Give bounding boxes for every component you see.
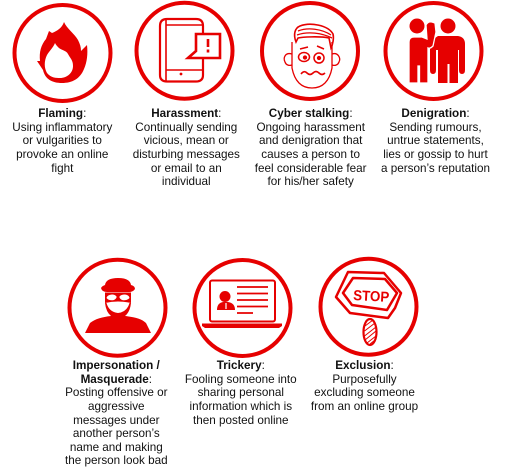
text: cyber stalking [254,107,367,188]
text: impersonation: Posting offensive or [65,386,168,399]
text: exclusion [311,359,418,413]
text: impersonation: aggressive [88,400,145,413]
text: cyber stalking: Cyber stalking: [269,107,353,120]
text: harassment: disturbing messages [133,148,240,161]
text: cyber stalking: causes a person to [261,148,360,161]
text: flaming: fight [51,162,73,174]
text: impersonation [65,359,168,467]
text: trickery [185,359,297,426]
text: denigration [381,107,490,174]
icon: tablet with alert message [136,3,232,99]
text: flaming: Using inflammatory [12,121,112,134]
text: exclusion: excluding someone [314,386,415,399]
text: denigration: lies or gossip to hurt [383,148,488,161]
text: flaming: Flaming: [38,107,86,120]
icon: masked burglar [70,260,166,356]
text: flaming: or vulgarities to [23,134,102,147]
text: denigration: a person’s reputation [381,162,490,174]
icon: flame [14,5,110,101]
text: impersonation: Masquerade: [81,373,152,386]
text: impersonation: messages under [73,414,160,426]
text: trickery: sharing personal [198,386,284,399]
text: flaming [12,107,112,174]
icon: stop sign: STOP [353,288,390,306]
text: impersonation: Impersonation / [73,359,160,372]
text: harassment: individual [162,175,211,188]
text: harassment: vicious, mean or [144,134,229,147]
icon: laptop with profile [194,260,290,356]
text: harassment: Harassment: [151,107,221,120]
text: denigration: Sending rumours, [389,121,482,134]
icon: two people gossiping [386,3,482,99]
text: cyber stalking: for his/her safety [267,175,354,188]
icon: worried face [262,3,358,99]
text: trickery: Fooling someone into [185,373,297,386]
text: denigration: Denigration: [401,107,470,120]
text: trickery: then posted online [193,414,289,426]
text: trickery: information which is [189,400,292,413]
text: impersonation: another person’s [73,427,160,440]
text: harassment: or email to an [151,162,222,174]
text: cyber stalking: Ongoing harassment [256,121,365,134]
text: exclusion: Exclusion: [335,359,394,372]
text: impersonation: the person look bad [65,454,168,467]
icon: stop sign [320,259,416,355]
text: flaming: provoke an online [16,148,108,161]
text: harassment: Continually sending [135,121,237,134]
text: exclusion: from an online group [311,400,418,413]
text: trickery: Trickery: [217,359,265,372]
text: denigration: untrue statements, [387,134,484,147]
text: harassment [133,107,240,188]
text: cyber stalking: and denigration that [259,134,362,147]
text: cyber stalking: feel considerable fear [255,162,367,174]
text: impersonation: name and making [70,441,163,454]
text: exclusion: Purposefully [332,373,397,386]
